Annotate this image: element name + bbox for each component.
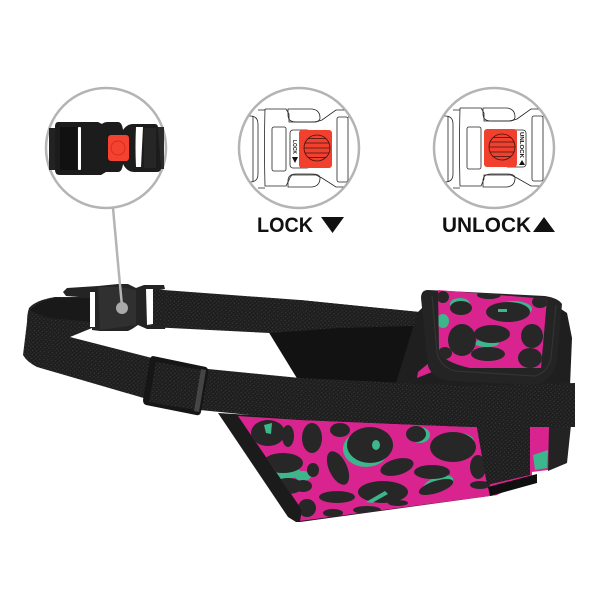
- upper strap: [150, 289, 418, 384]
- nose flap: [421, 290, 562, 385]
- inner mesh lining: [268, 300, 420, 386]
- muzzle body black edge: [218, 413, 497, 522]
- straps behind buckle: [49, 127, 164, 170]
- heading: LOCK: [257, 214, 344, 237]
- vertical closing strap: [470, 385, 530, 485]
- left strap loop: [23, 297, 152, 399]
- callout: lock diagram: [239, 88, 362, 208]
- nose cover backing: [395, 300, 572, 386]
- long lower strap: [144, 358, 575, 427]
- muzzle product: [23, 270, 575, 530]
- red button: [484, 129, 517, 167]
- small end clip: [488, 474, 537, 496]
- rear body side: [530, 425, 571, 472]
- heading: UNLOCK: UNLOCK: [442, 214, 531, 237]
- callout: buckle photo: [46, 88, 166, 208]
- flap leopard print: [437, 291, 548, 368]
- heading: LOCK: LOCK: [257, 214, 313, 237]
- muzzle body pink leopard print: [238, 416, 532, 521]
- unlock label: UNLOCK: [518, 132, 524, 158]
- connector line from callout to buckle: [113, 208, 119, 270]
- callout: unlock diagram: [434, 88, 557, 208]
- side buckle: [63, 284, 166, 331]
- buckle slots: [60, 127, 156, 170]
- infographic canvas: [23, 86, 575, 522]
- buckle pointer dot: [116, 270, 128, 314]
- red button: [299, 130, 332, 168]
- slider buckle: [143, 356, 208, 415]
- lock label: LOCK: [291, 140, 297, 154]
- red slider button: [108, 135, 129, 161]
- buckle body: [55, 122, 161, 175]
